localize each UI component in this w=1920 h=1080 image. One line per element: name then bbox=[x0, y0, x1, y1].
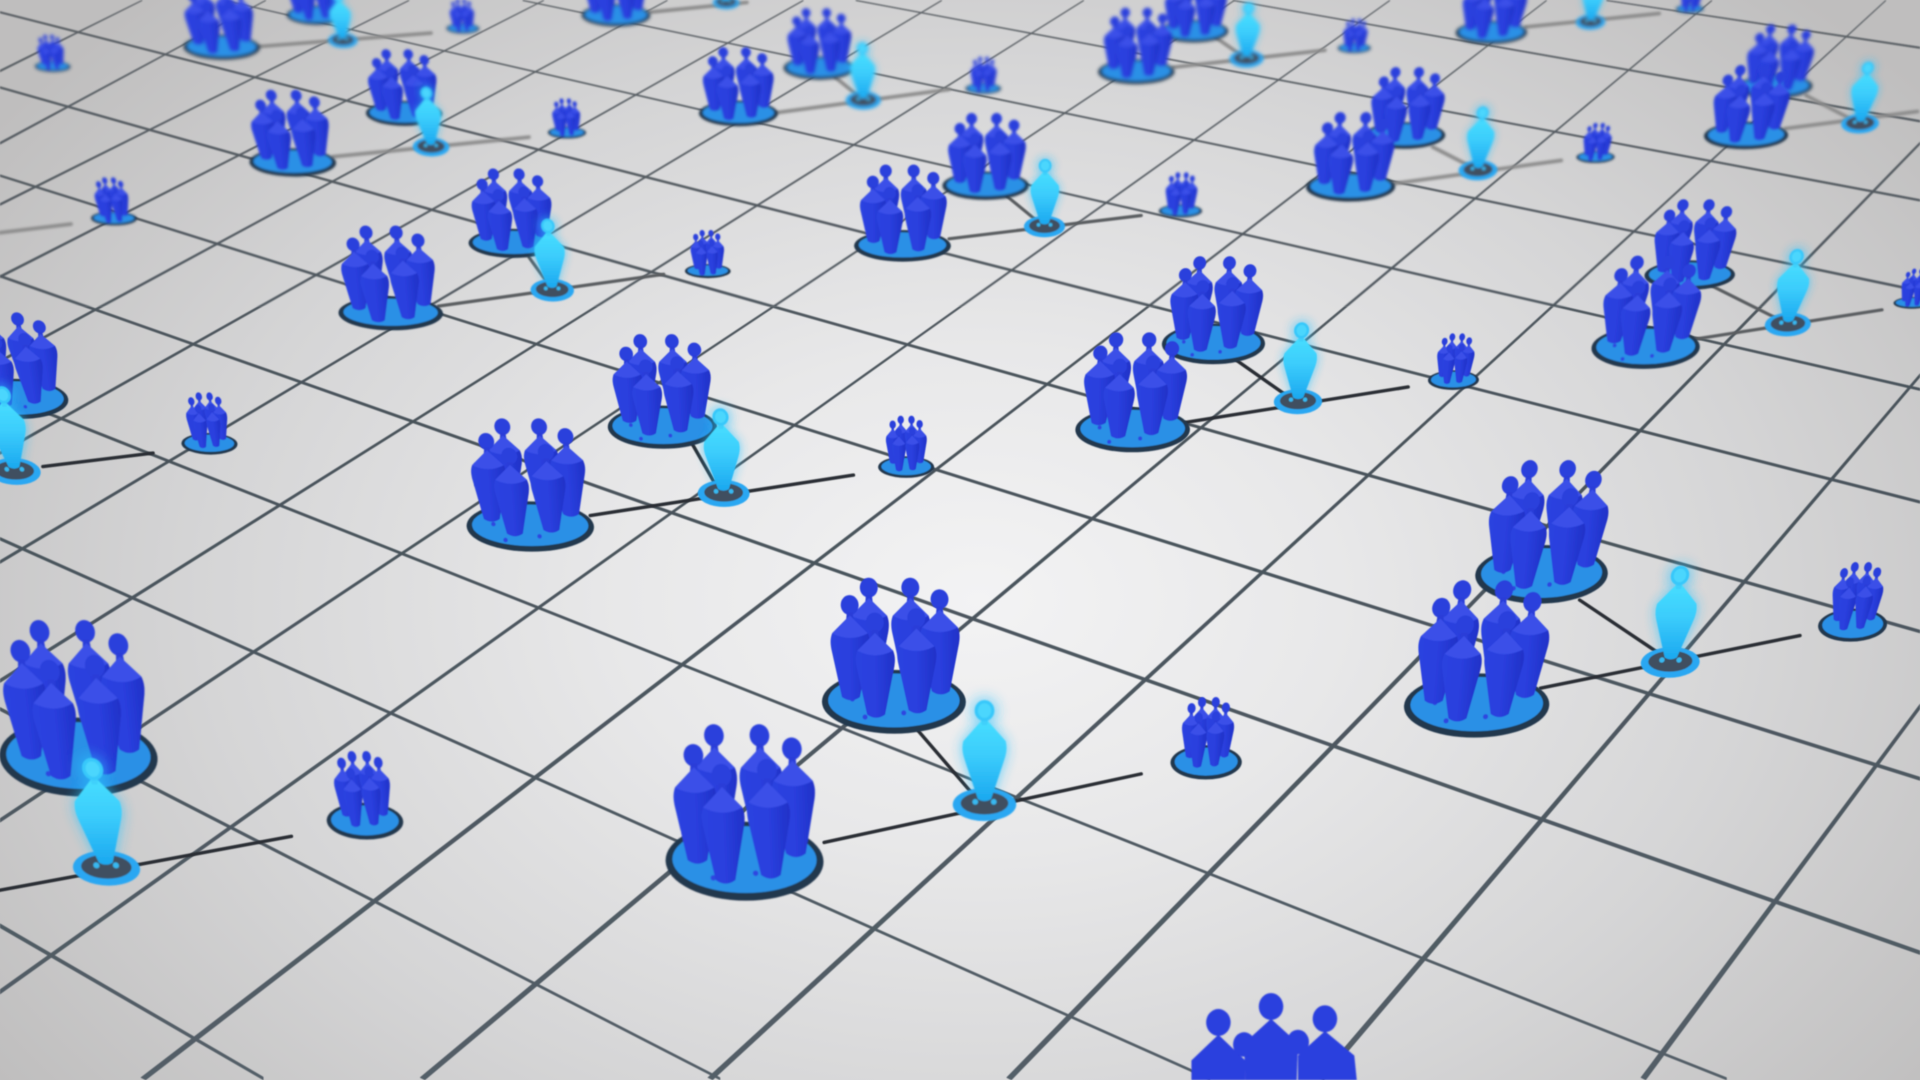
group upper b bbox=[696, 47, 778, 126]
group lower c bbox=[603, 334, 718, 449]
group upper d bbox=[1702, 65, 1797, 149]
group upper f bbox=[942, 113, 1029, 200]
mini group k bbox=[1893, 269, 1920, 309]
group top b bbox=[282, 0, 346, 25]
leader lower a bbox=[1273, 320, 1326, 414]
group top d bbox=[1159, 0, 1230, 43]
leader upper c bbox=[1840, 60, 1888, 133]
leader top d bbox=[1575, 0, 1610, 30]
mini group h bbox=[85, 177, 138, 225]
group top h bbox=[1737, 24, 1820, 98]
group upper e bbox=[241, 90, 338, 177]
foreground people groups bbox=[0, 620, 1357, 1080]
leader upper b bbox=[1458, 105, 1503, 180]
lower people groups bbox=[0, 256, 1896, 779]
group foreground a bbox=[0, 620, 162, 797]
upper people groups bbox=[85, 47, 1888, 225]
mini group d bbox=[1337, 18, 1373, 53]
mini group m bbox=[175, 392, 239, 455]
group top c bbox=[578, 0, 651, 27]
group foreground cut off at bottom bbox=[1191, 993, 1357, 1080]
mini group n bbox=[877, 416, 934, 478]
group upper a bbox=[360, 49, 444, 126]
mini group b bbox=[444, 0, 480, 34]
connection lines far row bbox=[0, 2, 1918, 233]
middle people groups bbox=[330, 157, 1920, 369]
group middle b bbox=[853, 165, 951, 262]
mini group f bbox=[546, 98, 586, 138]
leader middle c bbox=[1763, 247, 1821, 336]
leader lower b bbox=[694, 406, 750, 507]
far people groups bbox=[30, 0, 1820, 110]
mini group l bbox=[1427, 333, 1482, 390]
group upper c bbox=[1363, 67, 1450, 149]
group upper g bbox=[1305, 112, 1400, 202]
group middle d bbox=[330, 226, 445, 330]
leader top b bbox=[711, 0, 740, 9]
group top a bbox=[176, 0, 261, 60]
mini group p bbox=[1170, 697, 1244, 779]
group lower h bbox=[1401, 580, 1559, 738]
group lower d bbox=[1075, 332, 1192, 452]
group foreground b bbox=[660, 724, 825, 901]
group middle e bbox=[1589, 256, 1710, 369]
leader upper a bbox=[407, 85, 450, 156]
connection lines middle row bbox=[438, 196, 1882, 339]
group middle c bbox=[1643, 199, 1744, 290]
mini group a bbox=[30, 34, 71, 72]
mini group e bbox=[1675, 0, 1706, 13]
leader foreground a bbox=[953, 697, 1016, 821]
leader foreground b bbox=[57, 755, 142, 886]
leader lower d bbox=[1639, 563, 1711, 678]
leader top e bbox=[845, 41, 881, 110]
connection lines near row bbox=[0, 359, 1800, 890]
group lower f bbox=[1473, 460, 1618, 604]
leader top c bbox=[1229, 1, 1266, 68]
mini group i bbox=[1159, 172, 1203, 218]
leader lower c bbox=[0, 384, 43, 485]
group top g bbox=[1098, 8, 1176, 84]
group top e bbox=[1455, 0, 1532, 44]
group middle a bbox=[463, 168, 559, 258]
group lower e bbox=[459, 418, 596, 552]
leader top a bbox=[323, 0, 358, 48]
leader middle b bbox=[1024, 157, 1066, 237]
mini group o bbox=[1816, 562, 1896, 642]
group lower a bbox=[1161, 256, 1268, 364]
group top f bbox=[782, 8, 855, 80]
leader middle a bbox=[525, 217, 575, 302]
mini group g bbox=[1576, 123, 1618, 163]
mini group c bbox=[965, 56, 1001, 94]
group lower g bbox=[820, 578, 966, 734]
group lower b bbox=[0, 312, 71, 419]
mini group j bbox=[683, 230, 731, 278]
mini group q bbox=[320, 751, 405, 840]
